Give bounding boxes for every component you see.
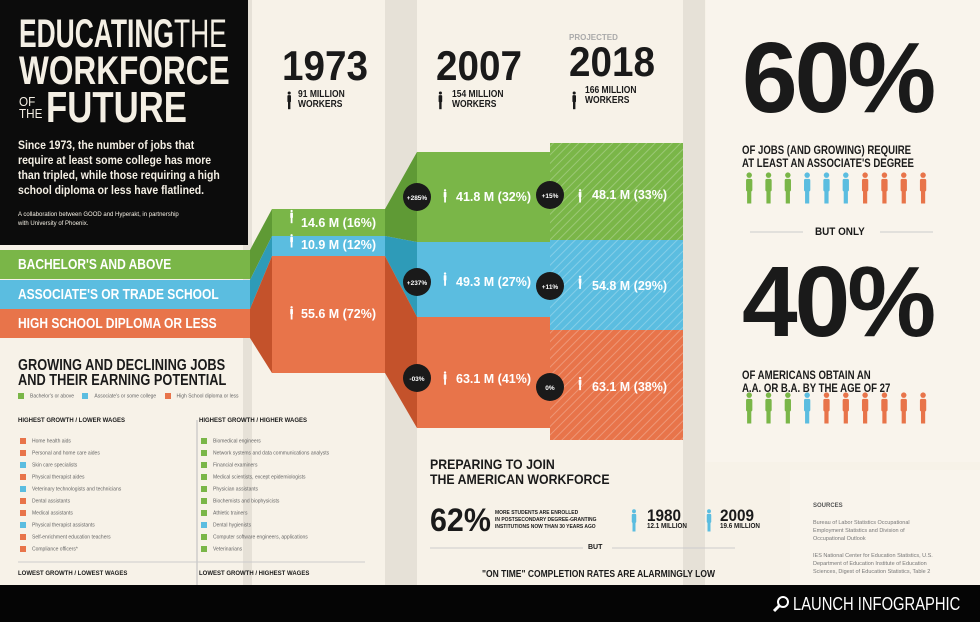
background svg: columns and flow chart: 41.8 M (32%) [456,190,531,204]
intro text: school diploma or less have flatlined. [18,185,204,197]
jobs section: LOWEST GROWTH / HIGHEST WAGES [199,571,309,577]
preparing section: "ON TIME" COMPLETION RATES ARE ALARMINGLY LOW [482,569,715,580]
year headers [282,42,368,110]
text: 2018 [569,38,655,85]
background svg: columns and flow chart: -03% [409,376,425,383]
preparing section: PREPARING TO JOIN [430,456,555,472]
preparing section: 12.1 MILLION [647,523,687,530]
jobs section: Medical scientists, except epidemiologists [213,474,306,480]
text: WORKERS [585,95,629,106]
preparing section: 1980 [647,506,681,525]
jobs section: Dental hygienists [213,522,251,528]
title: EDUCATINGTHE [19,12,227,56]
flow chart [250,143,683,440]
sources: IES National Center for Education Statistics, U.S. Department of Education Institute of Education Sciences, Digest of Education Statistics, Table 2 [813,553,933,575]
jobs section: Physical therapist assistants [32,522,95,528]
right panel stats: AT LEAST AN ASSOCIATE'S DEGREE [742,156,914,170]
background svg: columns and flow chart: 0% [545,385,555,392]
jobs section: Athletic trainers [213,510,247,516]
title box [0,0,248,245]
legend band labels: HIGH SCHOOL DIPLOMA OR LESS [18,315,217,332]
preparing section: THE AMERICAN WORKFORCE [430,471,610,487]
jobs section: Dental assistants [32,498,70,504]
background svg: columns and flow chart: +15% [542,193,559,200]
sources [813,502,933,575]
year headers: WORKERS [298,99,342,110]
credits: A collaboration between GOOD and Hyperakt, in partnership [18,212,179,218]
intro text: than tripled, while those requiring a high [18,170,220,182]
heading: AND THEIR EARNING POTENTIAL [18,372,226,389]
background svg: columns and flow chart: 63.1 M (41%) [456,372,531,386]
preparing section: 2009 [720,506,754,525]
preparing section: IN POSTSECONDARY DEGREE-GRANTING [495,517,596,523]
preparing section [430,456,760,580]
jobs section: Medical assistants [32,510,73,516]
text: A.A. OR B.A. BY THE AGE OF 27 [742,381,890,395]
preparing section: 19.6 MILLION [720,523,760,530]
intro text [18,140,220,197]
jobs section: Biochemists and biophysicists [213,498,279,504]
jobs section: Biomedical engineers [213,438,261,444]
jobs section: Computer software engineers, applications [213,534,308,540]
white person icons in bands [290,189,581,390]
jobs section: Veterinary technologists and technicians [32,486,121,492]
intro text: require at least some college has more [18,155,211,167]
text: OF AMERICANS OBTAIN AN [742,368,871,382]
heading: GROWING AND DECLINING JOBS [18,357,225,374]
text: 40% [742,246,933,358]
background svg: columns and flow chart: 49.3 M (27%) [456,275,531,289]
background svg: columns and flow chart: +237% [407,280,427,287]
background svg: columns and flow chart: 48.1 M (33%) [592,188,667,202]
title: WORKFORCE [19,49,230,93]
jobs section: Veterinarians [213,546,242,552]
launch button: LAUNCH INFOGRAPHIC [793,594,960,614]
right panel stats: 60% [742,22,933,134]
jobs section: HIGHEST GROWTH / LOWER WAGES [18,418,125,424]
circles [403,181,564,401]
sources: Bureau of Labor Statistics Occupational Employment Statistics and Division of Occupational Outlook [813,520,910,542]
intro text: Since 1973, the number of jobs that [18,140,194,152]
jobs section: Self-enrichment education teachers [32,534,111,540]
jobs section: Physical therapist aides [32,474,85,480]
jobs section [18,357,329,577]
credits: with University of Phoenix. [18,221,88,227]
right panel people [746,172,926,204]
text: 2007 [436,42,522,89]
text: 166 MILLION [585,85,636,96]
bottom bar [0,585,980,622]
credits [18,212,179,227]
text: WORKERS [452,99,496,110]
preparing section: INSTITUTIONS NOW THAN 30 YEARS AGO [495,524,596,530]
icon: magnifier [773,596,789,612]
title: THE [19,106,42,121]
legend band labels [0,250,250,338]
jobs section: Financial examiners [213,462,257,468]
jobs section: Personal and home care aides [32,450,100,456]
sources: SOURCES [813,503,843,509]
background svg: columns and flow chart: 10.9 M (12%) [301,238,376,252]
title: FUTURE [46,83,187,132]
title [19,12,230,132]
title: OF [19,94,35,109]
jobs section: Physician assistants [213,486,258,492]
background svg: columns and flow chart: 63.1 M (38%) [592,380,667,394]
preparing section: MORE STUDENTS ARE ENROLLED [495,510,578,516]
jobs section: Bachelor's or above Associate's or some college High School diploma or less [30,393,239,399]
year headers: 91 MILLION [298,89,345,100]
jobs section: HIGHEST GROWTH / HIGHER WAGES [199,418,307,424]
heading [18,357,226,389]
jobs section: Home health aids [32,438,71,444]
background svg: columns and flow chart: +285% [407,195,427,202]
jobs section: Skin care specialists [32,462,77,468]
text: 154 MILLION [452,89,503,100]
right panel stats: OF JOBS (AND GROWING) REQUIRE [742,143,911,157]
background svg: columns and flow chart: 55.6 M (72%) [301,307,376,321]
text: BUT ONLY [815,226,865,238]
background svg: columns and flow chart: 14.6 M (16%) [301,216,376,230]
background svg: columns and flow chart: +11% [542,284,558,291]
header people [287,91,576,109]
jobs section: Compliance officers* [32,546,78,552]
preparing section: BUT [588,544,602,551]
year headers: 1973 [282,42,368,89]
background svg: columns and flow chart: 54.8 M (29%) [592,279,667,293]
legend band labels: BACHELOR'S AND ABOVE [18,256,171,273]
preparing section: 62% [430,502,491,538]
legend band labels: ASSOCIATE'S OR TRADE SCHOOL [18,286,219,303]
jobs section: Network systems and data communications analysts [213,450,329,456]
jobs section: LOWEST GROWTH / LOWEST WAGES [18,571,127,577]
text: PROJECTED [569,33,618,42]
